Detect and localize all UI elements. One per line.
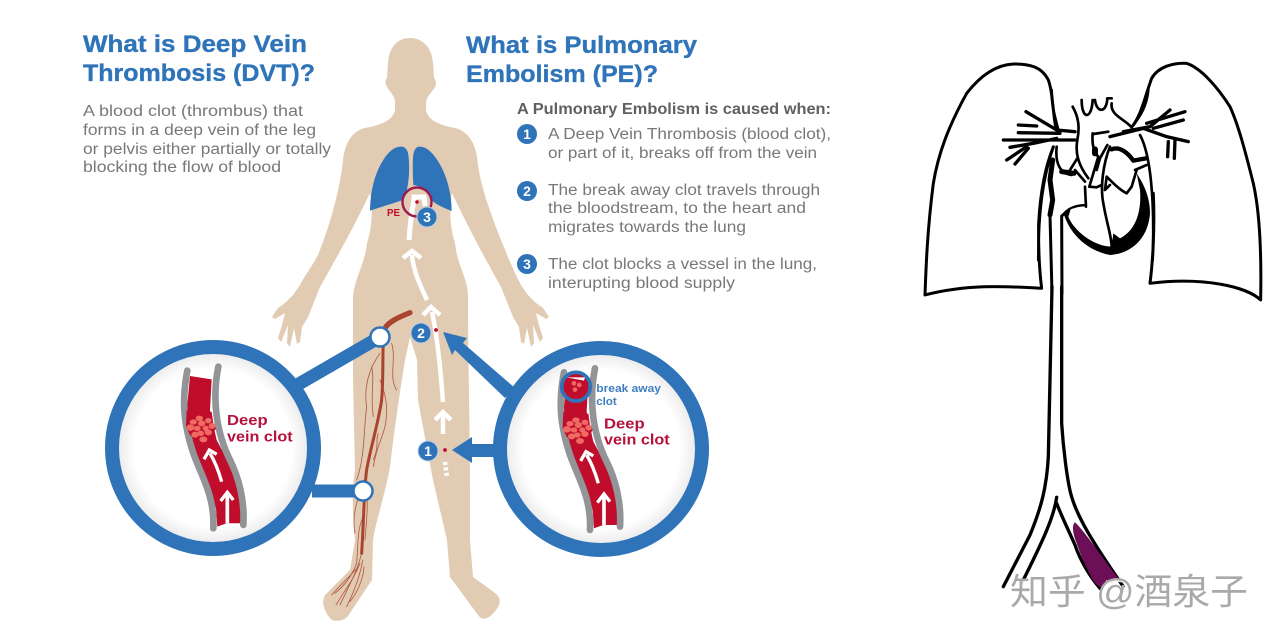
list item 2: The break away clot travels through	[548, 182, 820, 199]
text block: DVT description: forms in a deep vein of the leg	[83, 122, 316, 139]
heart muscle wall	[1063, 173, 1150, 255]
left pulmonary branches	[1003, 112, 1075, 164]
text block: DVT description: blocking the flow of blood	[83, 159, 281, 176]
heading: what is PE: Embolism (PE)?	[466, 61, 658, 88]
watermark: 知乎 @酒泉子	[1012, 572, 1250, 614]
marker: point 1: 1	[424, 443, 432, 459]
magnifier: break away clot: Deep	[604, 417, 645, 433]
text block: DVT description	[83, 103, 331, 176]
marker: point 2: 2	[417, 325, 425, 341]
clot	[1073, 522, 1118, 588]
list item 1: 1	[523, 126, 531, 142]
heading: what is DVT: What is Deep Vein	[83, 31, 307, 58]
magnifier: break away clot	[500, 348, 702, 550]
text block: DVT description: or pelvis either partially or totally	[83, 141, 331, 158]
body silhouette	[272, 38, 549, 621]
list item 3	[517, 254, 817, 292]
lungs	[370, 147, 452, 211]
magnifier: deep vein clot: Deep	[227, 413, 268, 429]
venous vessels	[1038, 90, 1153, 260]
list item 3: The clot blocks a vessel in the lung,	[548, 256, 817, 273]
list item 3: 3	[523, 256, 531, 272]
panel: heart and pulmonary vessels	[1003, 90, 1188, 293]
right pulmonary branches	[1110, 110, 1188, 158]
subheading: causes: A Pulmonary Embolism is caused when:	[517, 101, 831, 118]
magnifier: deep vein clot: vein clot	[227, 430, 293, 446]
marker: point 1	[418, 441, 447, 461]
marker: point 2	[411, 323, 438, 343]
connector lines: left magnifier	[297, 328, 390, 500]
magnifier: deep vein clot	[112, 347, 314, 549]
list item 2: the bloodstream, to the heart and	[548, 200, 806, 217]
magnifier: break away clot: break away	[596, 383, 661, 395]
heart chambers	[1089, 147, 1147, 247]
heading: what is DVT: Thrombosis (DVT)?	[83, 60, 315, 87]
list item 2	[517, 181, 820, 236]
right lung outline	[1133, 63, 1261, 300]
callout: PE marker in lung: PE	[387, 208, 400, 219]
arrow: from right magnifier to point 2	[443, 332, 515, 398]
list item 1: A Deep Vein Thrombosis (blood clot),	[548, 126, 831, 143]
migration path arrows	[403, 197, 451, 477]
vein network on leg	[332, 313, 410, 607]
vessel walls	[1003, 287, 1123, 588]
list item 2: migrates towards the lung	[548, 219, 746, 236]
list item 1: or part of it, breaks off from the vein	[548, 145, 817, 162]
list item 2: 2	[523, 183, 531, 199]
magnifier: break away clot: clot	[596, 396, 617, 408]
heading: what is PE	[466, 32, 697, 88]
callout: PE marker in lung	[387, 188, 437, 227]
aorta and arch vessels	[1073, 98, 1132, 187]
heading: what is DVT	[83, 31, 315, 87]
callout: PE marker in lung: 3	[423, 209, 431, 225]
list item 3: interupting blood supply	[548, 275, 735, 292]
watermark: 知乎 @酒泉子	[1010, 571, 1248, 612]
heading: what is PE: What is Pulmonary	[466, 32, 697, 59]
panel: lower vessels with clot	[1003, 287, 1123, 588]
text block: DVT description: A blood clot (thrombus) that	[83, 103, 304, 120]
magnifier: break away clot: vein clot	[604, 433, 670, 449]
left lung outline	[925, 64, 1056, 295]
panel: illustrated body diagram	[112, 38, 702, 621]
list item 1	[517, 124, 831, 162]
panel: line drawing of lungs	[925, 63, 1261, 300]
arrow: from right magnifier to point 1	[452, 437, 497, 463]
